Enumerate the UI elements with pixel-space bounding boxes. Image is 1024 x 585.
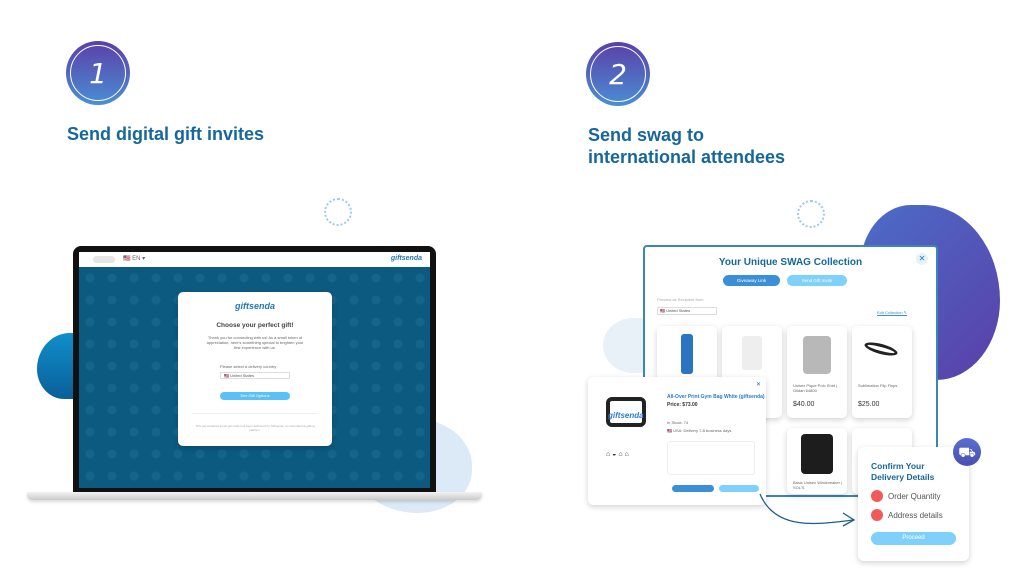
product detail modal: In Stock: 74 xyxy=(667,420,688,425)
screen header: 🇺🇸 EN ▾ xyxy=(123,256,145,262)
swag collection panel: Edit Collection ✎ xyxy=(877,310,907,315)
dotted circle right xyxy=(797,200,825,228)
gift selection card xyxy=(178,292,332,446)
action buttons: Giveaway Link xyxy=(737,278,766,283)
swag collection panel: Send Gift Invite xyxy=(802,278,832,283)
purple blob xyxy=(860,205,1000,380)
dotted circle left xyxy=(324,198,352,226)
light blob right xyxy=(603,318,663,373)
product detail modal: 🇺🇸 USA: Delivery 7-8 business days xyxy=(667,428,731,433)
panel title: Your Unique SWAG Collection xyxy=(719,257,862,268)
confirm delivery card xyxy=(858,447,969,561)
swag collection panel xyxy=(643,245,938,497)
product detail modal: ⌂ ◒ ⌂ ⌂ xyxy=(606,451,629,458)
screen patterned background xyxy=(79,267,430,488)
laptop base xyxy=(27,492,482,500)
gift selection card: giftsenda xyxy=(235,301,275,311)
left blob xyxy=(37,333,97,399)
screen header xyxy=(79,252,430,267)
confirm delivery card: Confirm Your xyxy=(871,461,925,471)
gift selection card: See Gift Options xyxy=(240,393,270,398)
product detail modal xyxy=(588,377,766,505)
swag collection panel: ✕ xyxy=(919,254,925,263)
gift selection card: This personalized email gift invite has been delivered by Giftsenda, an international gifting platform. xyxy=(195,424,315,432)
confirm delivery card: Proceed xyxy=(902,535,925,541)
product detail modal: ✕ xyxy=(756,382,761,388)
arrow: curved connector xyxy=(759,494,856,527)
gift selection card: 🇺🇸 United States xyxy=(224,373,254,378)
swag collection panel: $25.00 xyxy=(858,401,879,408)
confirm delivery card: Order Quantity xyxy=(888,492,940,501)
action buttons xyxy=(723,275,780,286)
swag collection panel: Unisex Pique Polo Shirt | Gildan 64800 xyxy=(793,383,837,393)
swag collection panel: Basic Unisex Windbreaker | SOL'S xyxy=(793,480,842,490)
swag collection panel: $40.00 xyxy=(793,401,814,408)
gift selection card: Please select a delivery country xyxy=(220,364,276,369)
step 2 badge xyxy=(586,42,650,106)
light blob bottom xyxy=(352,418,472,513)
product detail modal: All-Over Print Gym Bag White (giftsenda) xyxy=(667,394,765,400)
heading: step 2: international attendees xyxy=(588,147,785,167)
icon: truck: ⛟ xyxy=(958,444,976,460)
gift selection card: Choose your perfect gift! xyxy=(216,322,294,329)
product detail modal: Price: $73.00 xyxy=(667,402,698,408)
swag collection panel: Preview as Recipient from xyxy=(657,297,703,302)
product grid xyxy=(657,326,717,418)
laptop xyxy=(26,246,483,503)
heading: step 2: Send swag to xyxy=(588,125,704,145)
heading: step 2 xyxy=(588,125,785,167)
product detail modal: giftsenda xyxy=(608,411,644,420)
gift selection card: Thank you for connecting with us! As a small token of appreciation, here's something special to brighten your first experience with us. xyxy=(207,335,303,350)
step 2 badge: 2 xyxy=(609,58,627,90)
swag collection panel: Sublimation Flip Flops xyxy=(858,383,897,388)
confirm delivery card: Address details xyxy=(888,511,943,520)
icon: truck xyxy=(953,438,981,466)
heading: step 1: Send digital gift invites xyxy=(67,124,264,144)
screen header: giftsenda xyxy=(391,255,422,262)
laptop screen bezel xyxy=(73,246,436,494)
confirm delivery card: Delivery Details xyxy=(871,472,934,482)
step 1 badge: 1 xyxy=(89,56,107,90)
swag collection panel: 🇺🇸 United States xyxy=(660,308,690,313)
step 1 badge xyxy=(66,41,130,105)
